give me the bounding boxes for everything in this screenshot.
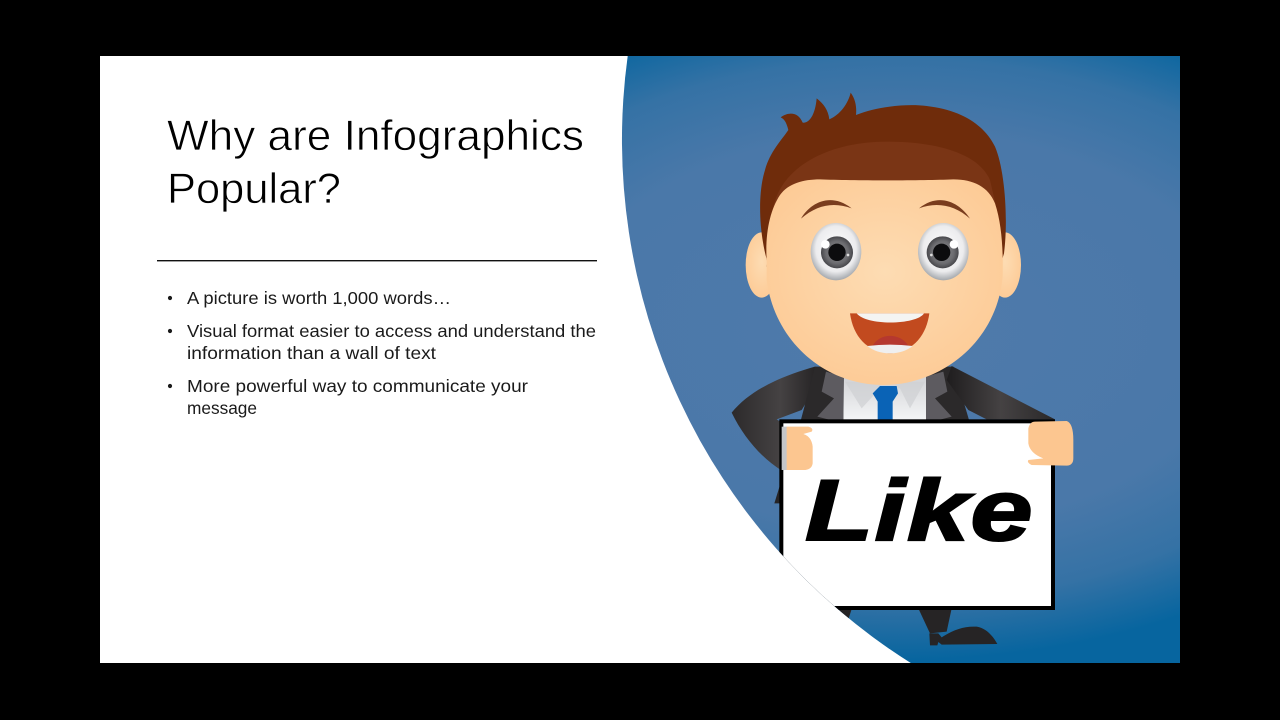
- title: Why are Infographics: [167, 112, 584, 160]
- tie: [873, 386, 898, 423]
- title: Popular?: [167, 165, 341, 213]
- bullet: picture worth 1,000 words: A picture is worth 1,000 words…: [187, 288, 451, 308]
- eyebrows: [801, 200, 970, 219]
- ears: [746, 232, 1021, 298]
- title: [167, 112, 584, 213]
- title divider: [157, 260, 597, 261]
- lapels: [817, 372, 844, 423]
- illustration: cartoon man holding Like sign: [732, 93, 1073, 645]
- legs and shoe: [838, 610, 998, 646]
- right hand: [1028, 421, 1073, 466]
- sign: [779, 419, 1055, 610]
- bullet: visual format: information than a wall of text: [187, 343, 436, 363]
- bullet: more powerful: More powerful way to communicate your: [187, 376, 528, 396]
- right eye: [918, 223, 969, 280]
- jacket: [732, 366, 1055, 503]
- left eye: [811, 223, 861, 280]
- panel: blue curved background: [622, 56, 1180, 663]
- sign text: Like: Like: [805, 463, 1032, 559]
- bullet: visual format: Visual format easier to access and understand the: [187, 321, 596, 341]
- slide background: [100, 56, 1180, 663]
- bullet list: [168, 288, 596, 418]
- hair: [760, 93, 1006, 267]
- left hand: [782, 427, 813, 470]
- bullet: more powerful: [168, 376, 528, 418]
- shirt: [843, 377, 926, 423]
- mouth: [850, 313, 929, 353]
- bullet: visual format: [168, 321, 596, 363]
- face: [766, 179, 1003, 385]
- bullet: more powerful: message: [187, 398, 257, 418]
